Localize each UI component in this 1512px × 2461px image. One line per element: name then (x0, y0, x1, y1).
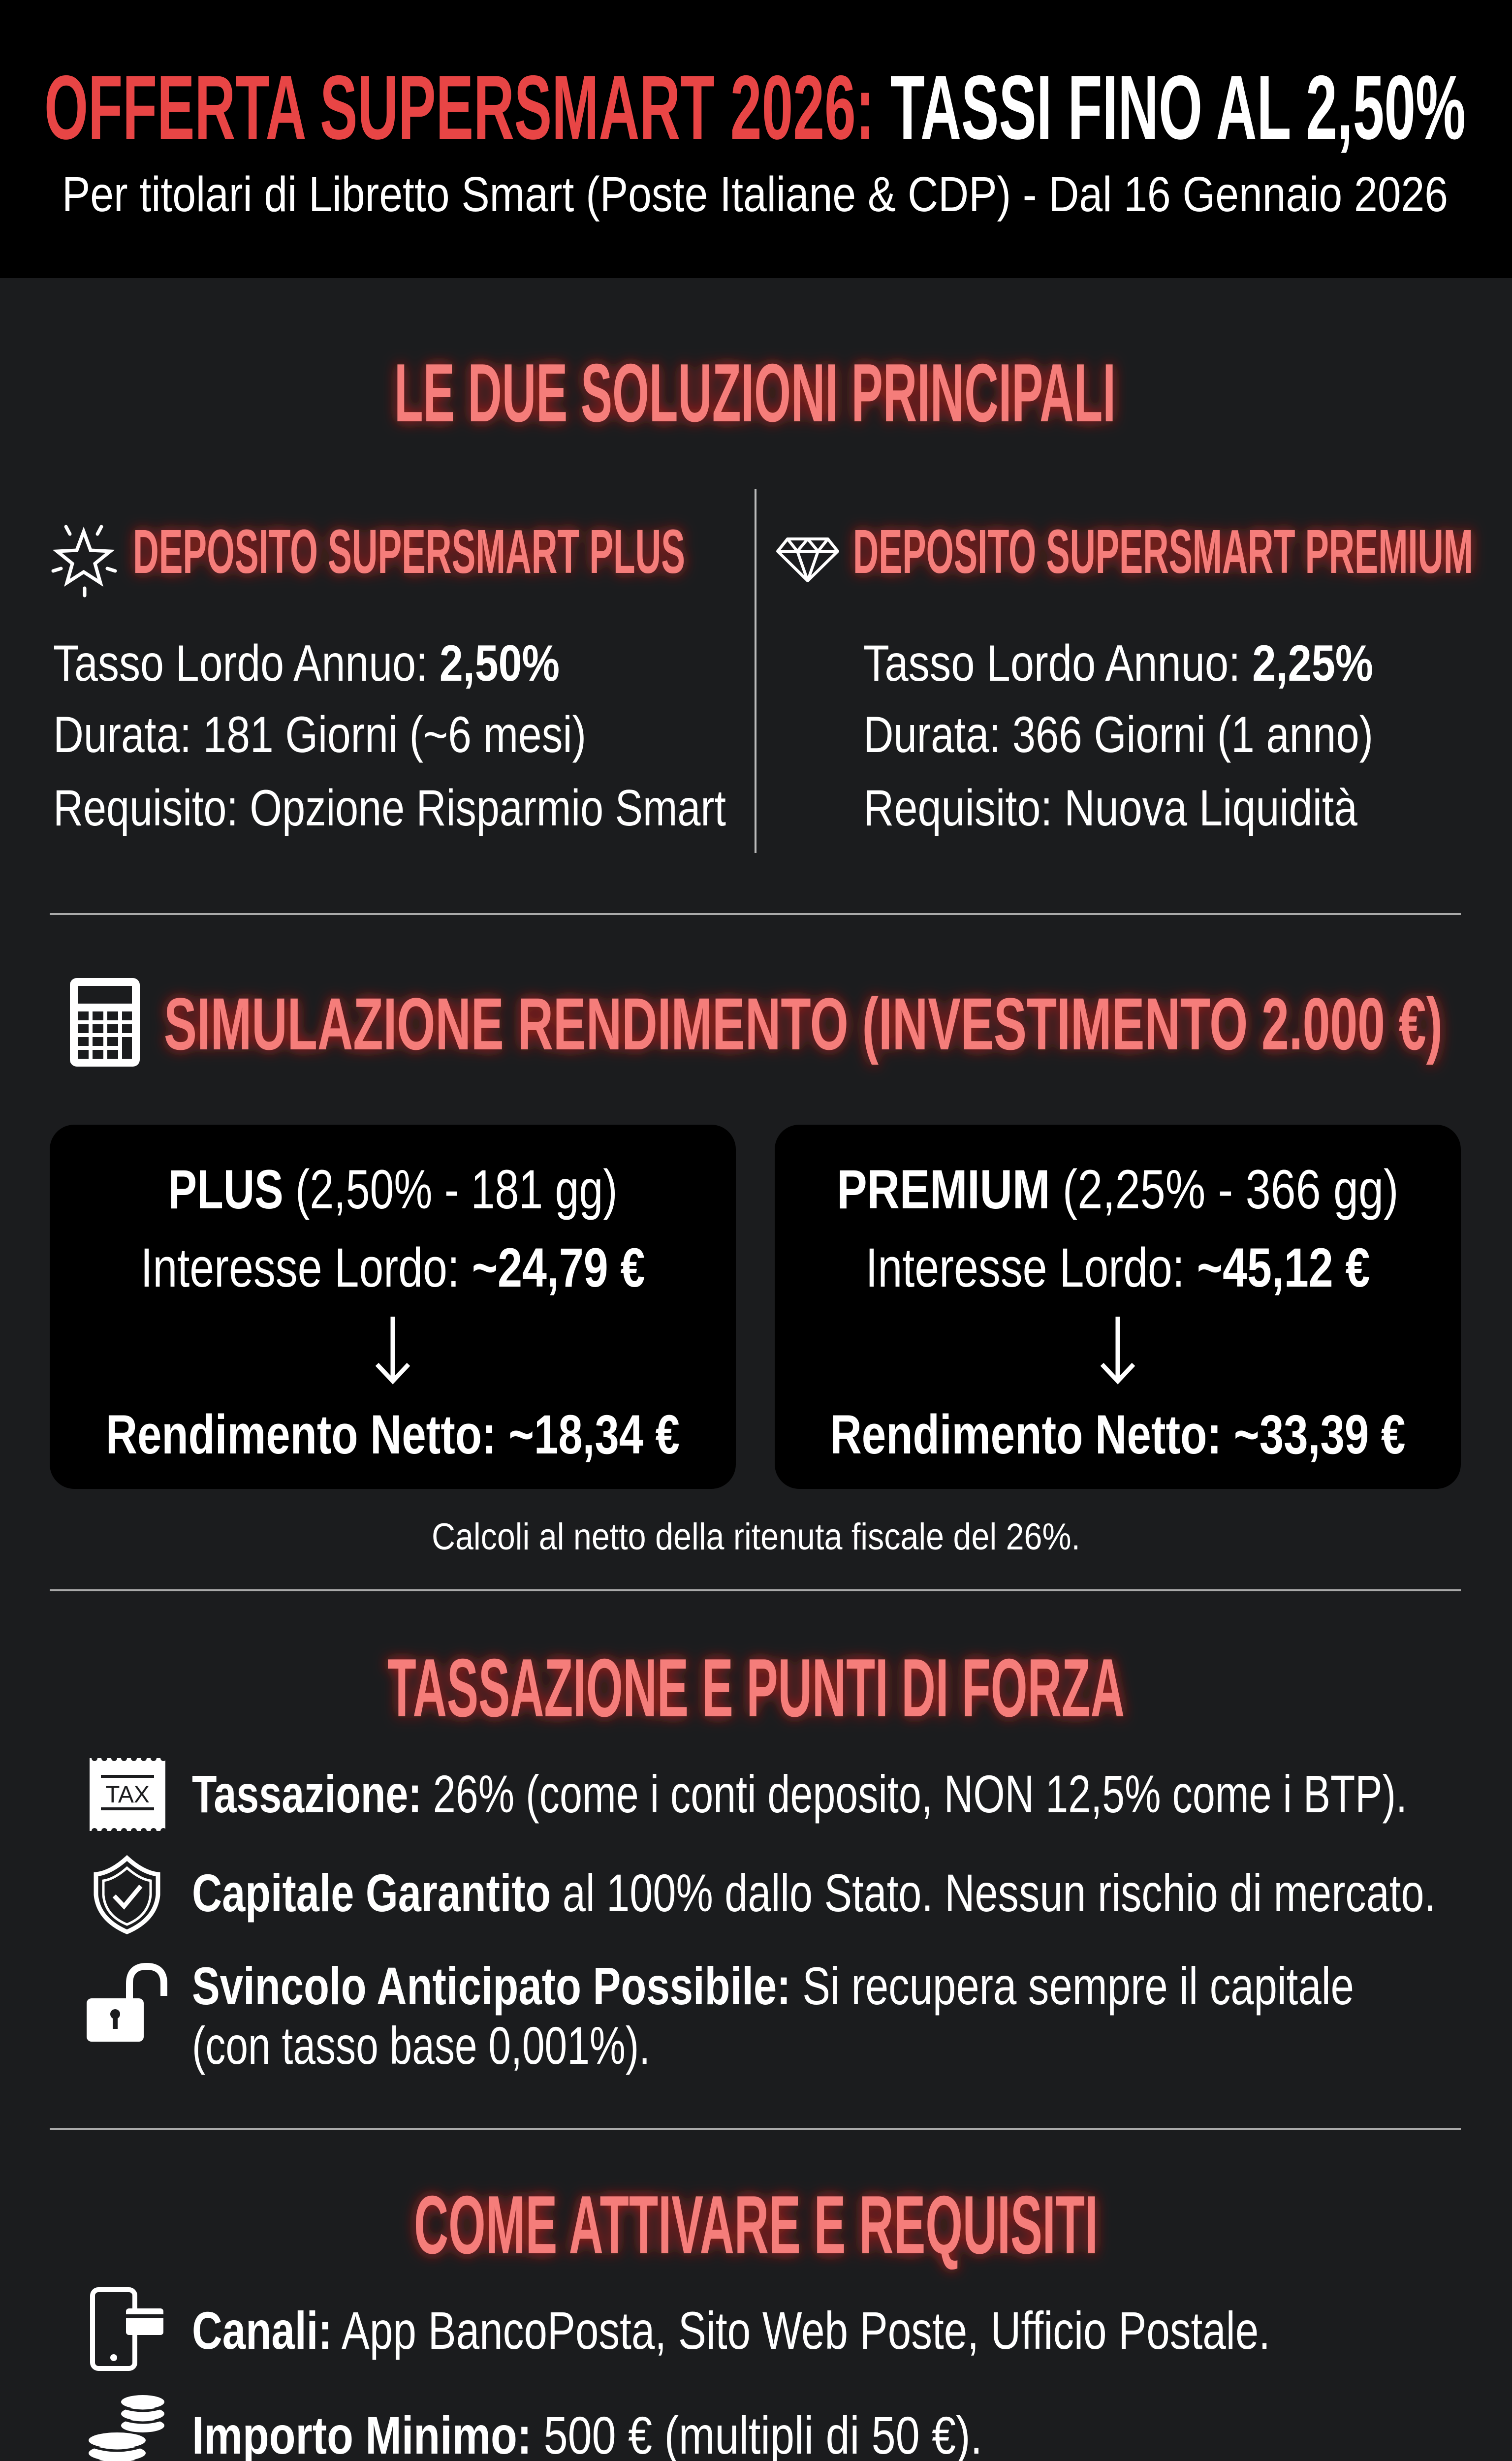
panel: simulazione plus: PLUS (2,50% - 181 gg) (168, 1159, 617, 1220)
panel: simulazione premium: Interesse Lordo: ~45,12 € (865, 1237, 1370, 1298)
panel: simulazione plus: Interesse Lordo: ~24,79 € (141, 1237, 645, 1298)
arrow (377, 1317, 409, 1381)
premium details: Tasso Lordo Annuo: 2,25% (863, 635, 1373, 692)
premium details: Requisito: Nuova Liquidità (863, 780, 1357, 837)
icon: tax (90, 1755, 166, 1834)
list: requisiti: Canali: App BancoPosta, Sito Web Poste, Ufficio Postale. (192, 2301, 1270, 2360)
panel: plus (53, 517, 726, 837)
icon: tax: TAX (105, 1782, 150, 1808)
list: punti di forza: (con tasso base 0,001%). (192, 2016, 650, 2075)
panel: premium (778, 517, 1473, 837)
list: requisiti (89, 2290, 1270, 2461)
panel: simulazione plus (50, 1125, 736, 1489)
panel: simulazione premium (775, 1125, 1461, 1489)
premium details: Durata: 366 Giorni (1 anno) (863, 706, 1373, 763)
plus details: Durata: 181 Giorni (~6 mesi) (53, 706, 586, 763)
plus details: Tasso Lordo Annuo: 2,50% (53, 635, 560, 692)
icon: shield (96, 1858, 158, 1932)
plus heading: DEPOSITO SUPERSMART PLUS (133, 517, 685, 586)
footnote: Calcoli al netto della ritenuta fiscale del 26%. (432, 1516, 1080, 1558)
panel: simulazione premium: PREMIUM (2,25% - 366 gg) (837, 1159, 1399, 1220)
icon: phone (93, 2290, 163, 2368)
plus details (53, 635, 726, 837)
plus details: Requisito: Opzione Risparmio Smart (53, 780, 726, 837)
list: punti di forza (87, 1755, 1436, 2075)
header band (0, 0, 1512, 278)
icon: diamond (778, 539, 838, 581)
premium details (863, 635, 1373, 837)
icon: star (53, 527, 115, 596)
icon: calculator (70, 978, 140, 1067)
panel: simulazione plus: Rendimento Netto: ~18,34 € (106, 1404, 680, 1465)
arrow (1102, 1317, 1134, 1381)
list: punti di forza: Svincolo Anticipato Possibile: Si recupera sempre il capitale (192, 1956, 1354, 2016)
icon: coins (89, 2395, 164, 2461)
icon: lock (87, 1966, 164, 2042)
